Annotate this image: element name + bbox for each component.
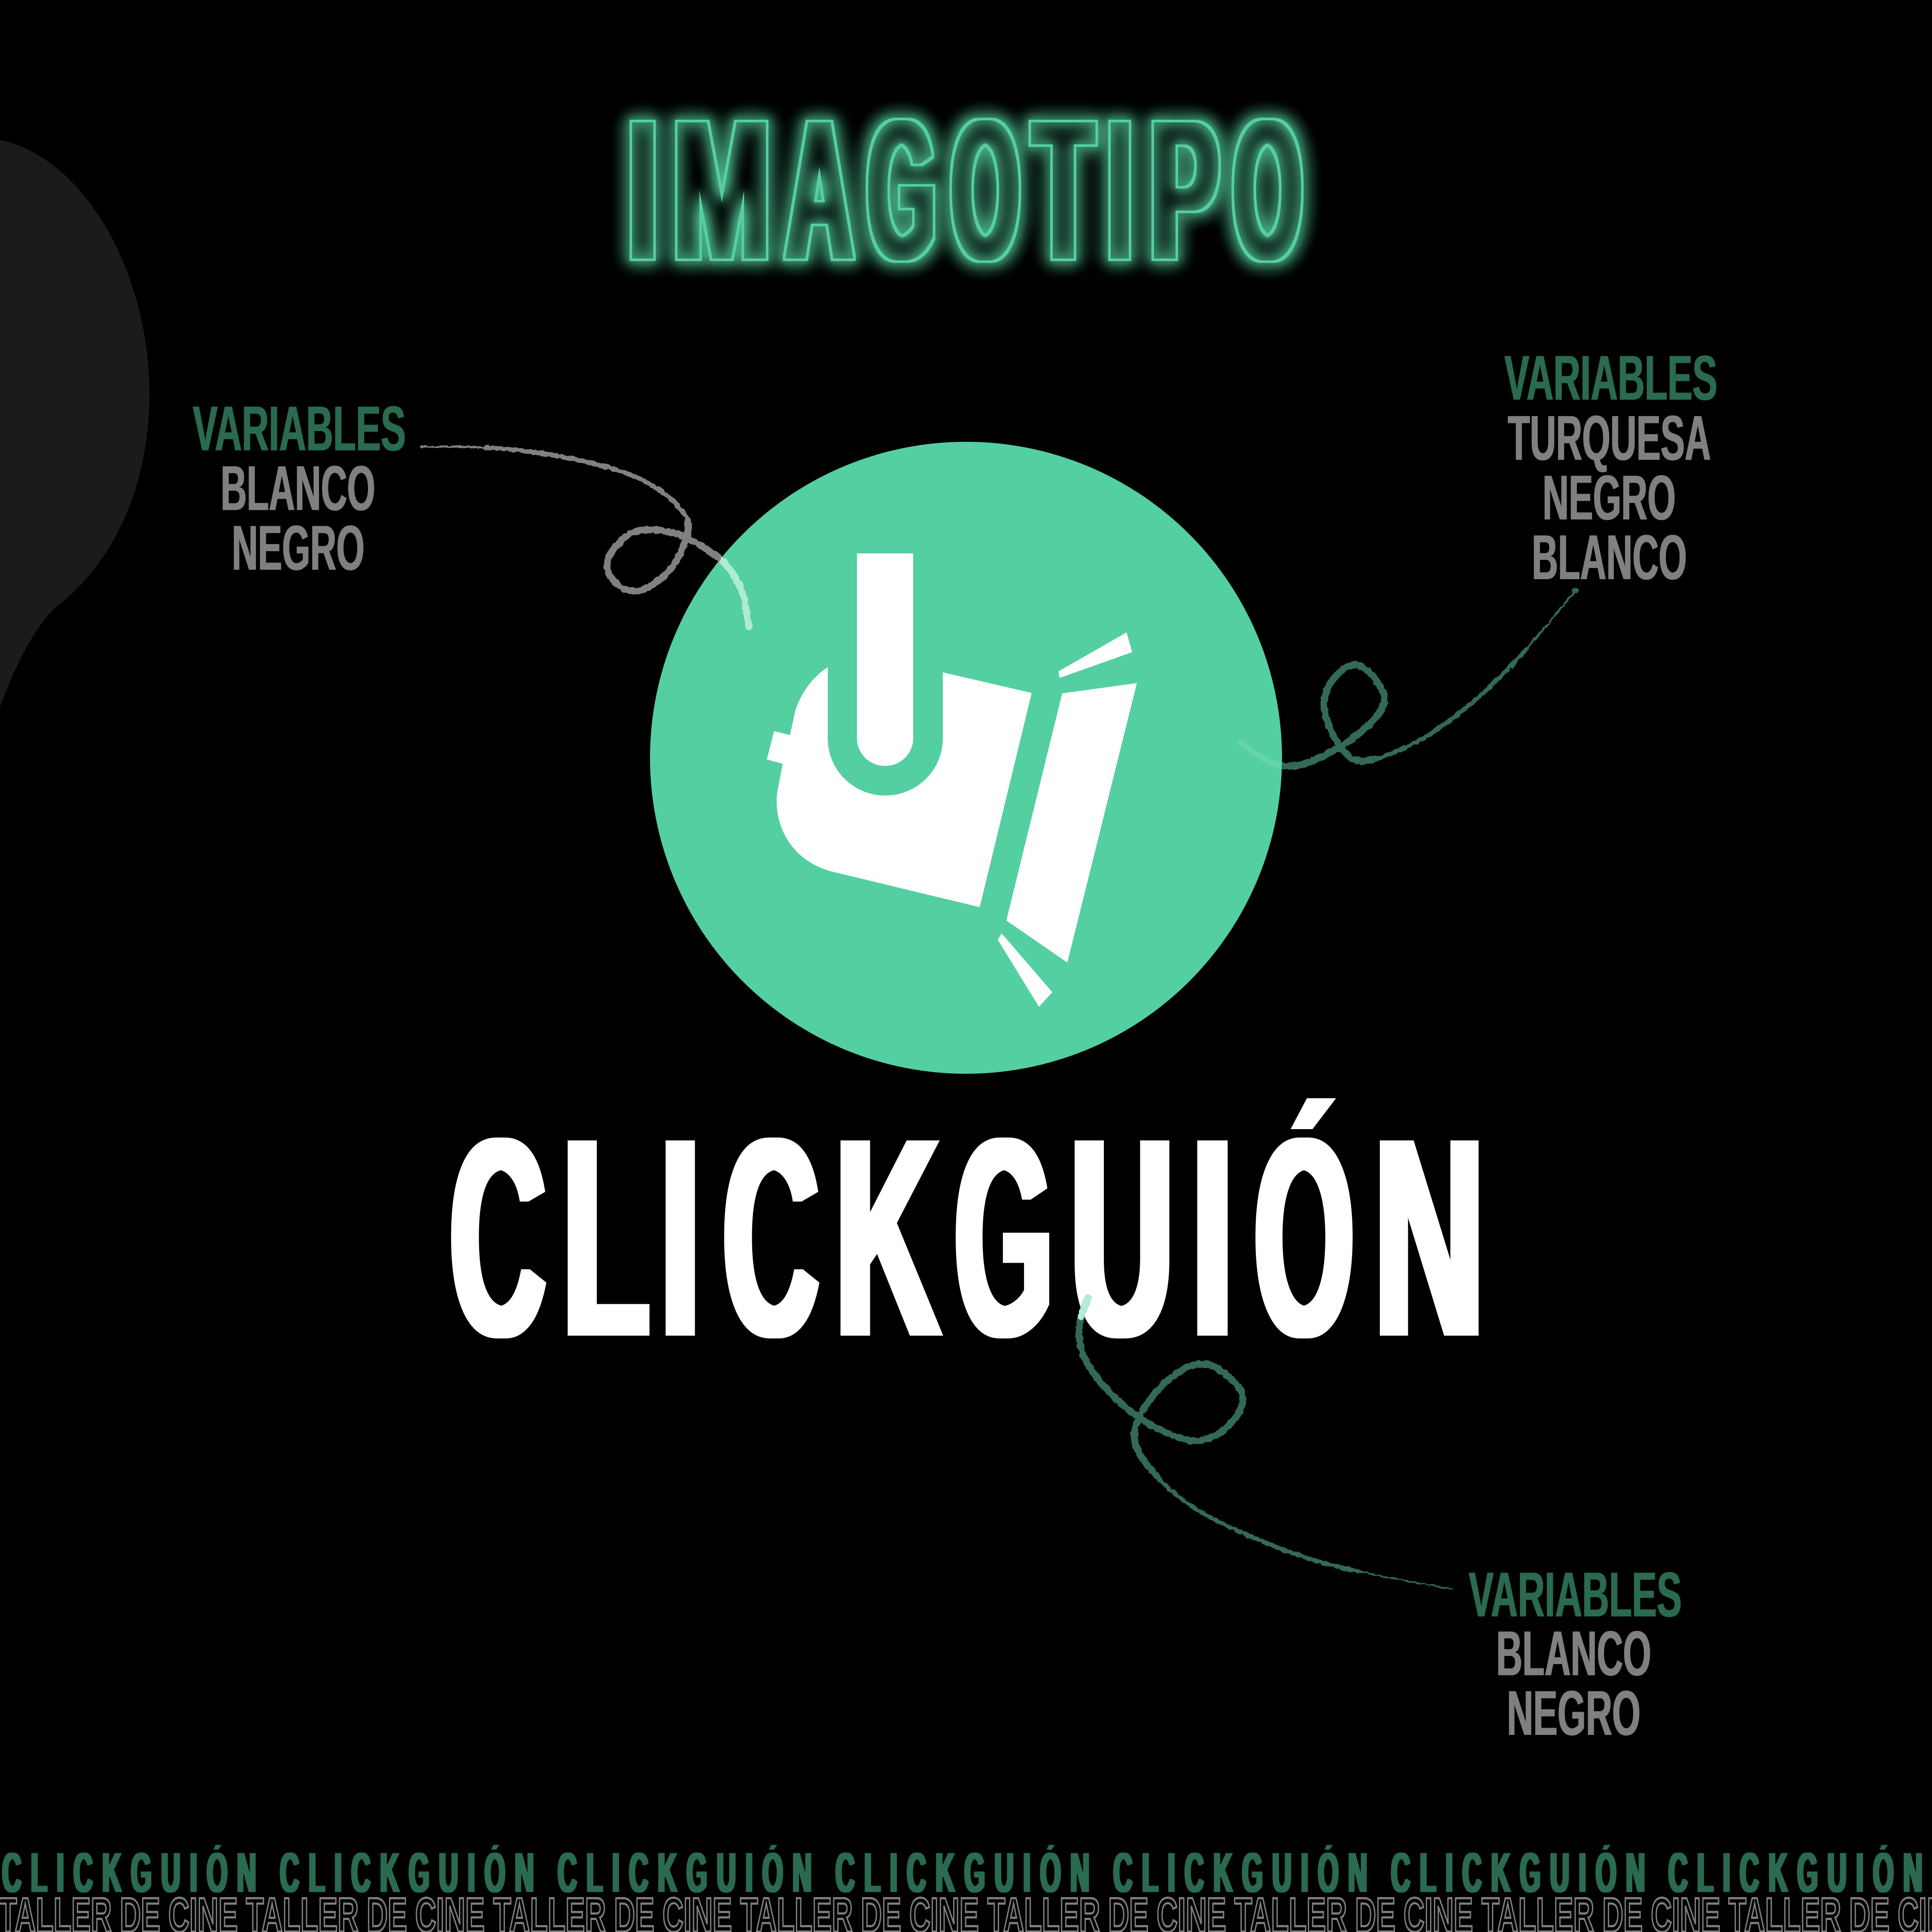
label: NEGRO: NEGRO [232, 513, 365, 583]
logo icon: clapper megaphone [767, 553, 1137, 1007]
title: IMAGOTIPO neon outline: A [787, 79, 852, 301]
label: NEGRO: NEGRO [1507, 1678, 1640, 1749]
footer band: repeated CLICKGUIÓN: CLICKGUIÓN [1668, 1841, 1932, 1904]
title: IMAGOTIPO neon outline: M [673, 79, 770, 301]
footer band: repeated CLICKGUIÓN: CLICKGUIÓN [2, 1841, 266, 1904]
label: BLANCO: BLANCO [1532, 522, 1687, 593]
title: IMAGOTIPO neon outline: O [952, 79, 1019, 301]
label: BLANCO: BLANCO [1496, 1618, 1651, 1689]
title: IMAGOTIPO neon outline: T [1033, 79, 1093, 301]
label block: right variables [1504, 343, 1717, 593]
wordmark: CLICKGUIÓN [450, 1079, 1485, 1396]
footer band: repeated CLICKGUIÓN: CLICKGUIÓN [835, 1841, 1099, 1904]
label: NEGRO: NEGRO [1543, 462, 1676, 533]
wordmark: CLICKGUIÓN: I [660, 1079, 700, 1396]
squiggle arrow: bottom [1079, 1297, 1452, 1589]
title: IMAGOTIPO neon outline: P [1151, 79, 1218, 301]
label block: bottom variables [1469, 1559, 1682, 1749]
label: BLANCO: BLANCO [221, 453, 375, 524]
label: TURQUESA: TURQUESA [1508, 403, 1711, 474]
footer band: repeated CLICKGUIÓN [2, 1841, 1932, 1904]
title: IMAGOTIPO neon outline: I [1109, 79, 1130, 301]
squiggle arrow: left [422, 447, 749, 627]
wordmark: CLICKGUIÓN: C [450, 1079, 546, 1396]
wordmark: CLICKGUIÓN: N [1374, 1079, 1485, 1396]
wordmark: CLICKGUIÓN: C [723, 1079, 819, 1396]
footer band: repeated TALLER DE CINE outline [0, 1888, 1932, 1932]
icon: right panel [1006, 683, 1137, 963]
wordmark: CLICKGUIÓN: K [835, 1079, 940, 1396]
logo circle [650, 442, 1282, 1074]
title: IMAGOTIPO neon outline: I [629, 79, 656, 301]
icon: clapper stick [857, 553, 913, 766]
icon: top ray [1058, 632, 1132, 678]
footer band: repeated CLICKGUIÓN: CLICKGUIÓN [280, 1841, 544, 1904]
heading: VARIABLES: VARIABLES [1504, 343, 1717, 413]
title: IMAGOTIPO neon outline: G [868, 79, 935, 301]
footer band: repeated CLICKGUIÓN: CLICKGUIÓN [1113, 1841, 1377, 1904]
wordmark: CLICKGUIÓN: Ó [1255, 1079, 1354, 1396]
squiggle arrow: right [1240, 591, 1575, 766]
label block: left variables [193, 393, 406, 583]
title: IMAGOTIPO neon outline [629, 79, 1301, 301]
heading: VARIABLES: VARIABLES [1469, 1559, 1682, 1630]
wordmark: CLICKGUIÓN: G [955, 1079, 1053, 1396]
text: O [1234, 79, 1301, 301]
wordmark: CLICKGUIÓN: L [562, 1079, 650, 1396]
icon: body [767, 667, 1032, 907]
wordmark: CLICKGUIÓN: U [1070, 1079, 1174, 1396]
wordmark: CLICKGUIÓN: I [1191, 1079, 1233, 1396]
icon: bottom ray [998, 933, 1052, 1007]
background blob [0, 140, 149, 707]
footer band: repeated CLICKGUIÓN: CLICKGUIÓN [1391, 1841, 1655, 1904]
heading: VARIABLES: VARIABLES [193, 393, 406, 464]
footer band: repeated CLICKGUIÓN: CLICKGUIÓN [558, 1841, 821, 1904]
